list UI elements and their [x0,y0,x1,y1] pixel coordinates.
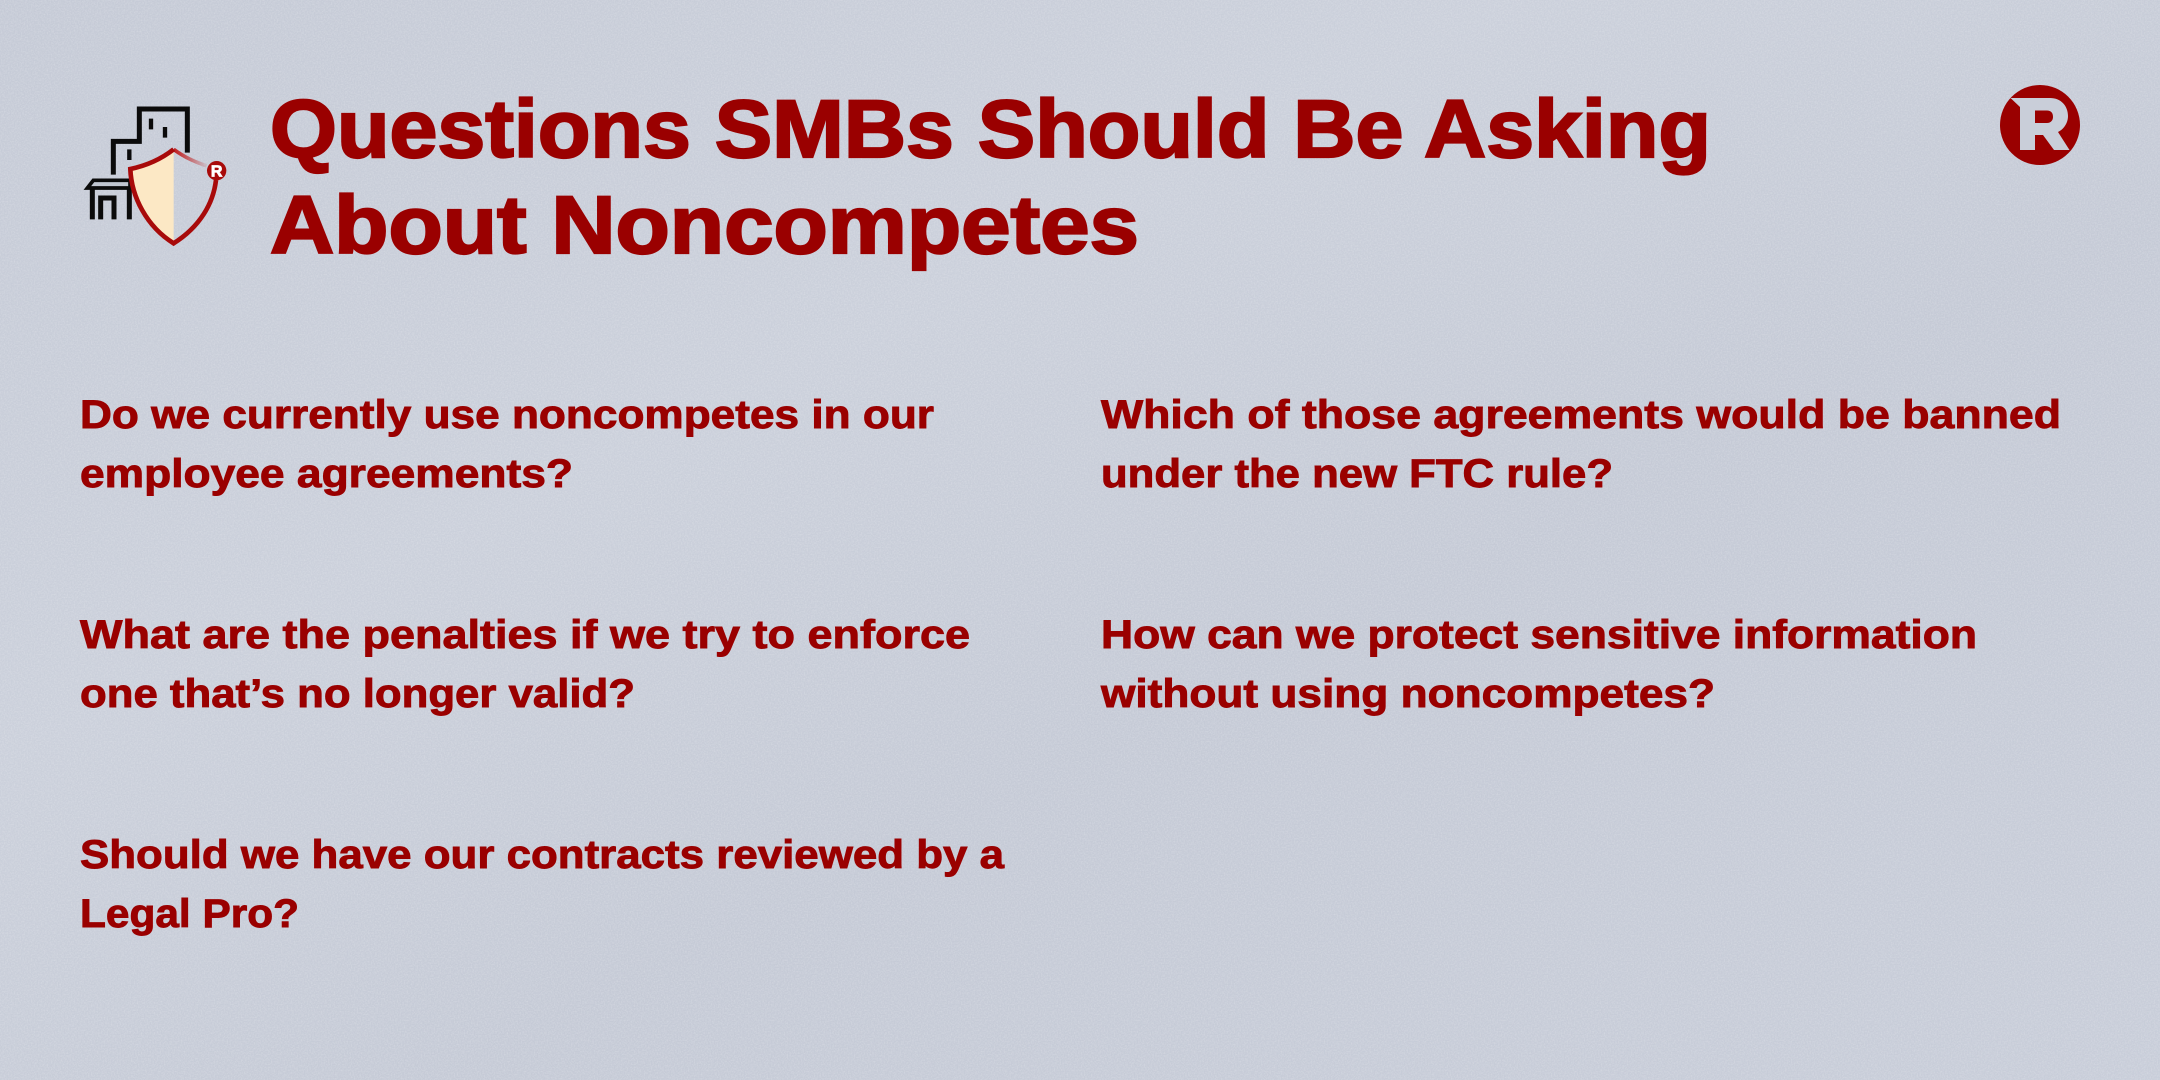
question 3: one that’s no longer valid? [80,672,635,716]
icon: shield [130,149,216,243]
question 1: employee agreements? [80,452,573,496]
question 4: How can we protect sensitive information [1101,613,1977,657]
icon: building with shield [87,109,226,243]
title: About Noncompetes [270,180,1139,271]
icon: buildings outline [87,109,187,219]
question 4 [1100,613,1977,716]
question 5: Legal Pro? [80,892,299,936]
question 2 [1101,393,2061,496]
question 3: What are the penalties if we try to enforce [80,613,970,657]
question 2: Which of those agreements would be banned [1101,393,2061,437]
question 5 [80,833,1005,936]
question 3 [80,613,970,716]
question 1: Do we currently use noncompetes in our [80,393,934,437]
title [270,84,1711,271]
title: Questions SMBs Should Be Asking [270,84,1711,175]
question 2: under the new FTC rule? [1101,452,1613,496]
logo: R roundel [2000,85,2080,165]
question 4: without using noncompetes? [1100,672,1715,716]
icon: small R badge: R [211,164,223,181]
question 1 [80,393,934,496]
question 5: Should we have our contracts reviewed by a [80,833,1005,877]
